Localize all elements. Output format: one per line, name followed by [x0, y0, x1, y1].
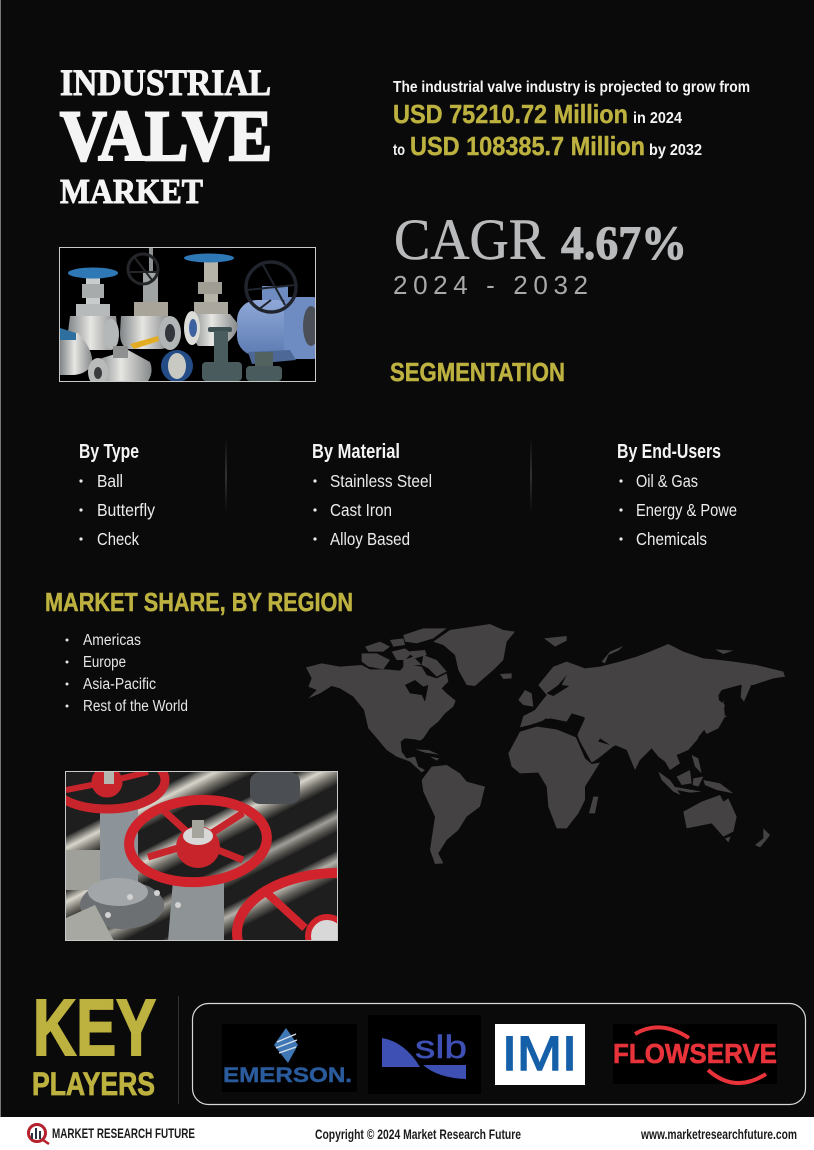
butterfly valve	[161, 350, 193, 382]
title: INDUSTRIAL	[60, 63, 271, 104]
column: by type	[79, 441, 155, 549]
footer band	[0, 1117, 814, 1150]
logo: emerson: EMERSON.	[223, 1064, 352, 1087]
CAGR: 4.67%	[561, 217, 687, 270]
title	[60, 63, 272, 211]
footer band: MARKET RESEARCH FUTURE	[52, 1125, 195, 1141]
main wheel	[126, 795, 270, 887]
world map	[306, 624, 785, 864]
left check valve	[60, 328, 92, 375]
title: VALVE	[60, 96, 272, 176]
logo: imi: IMI	[502, 1028, 577, 1081]
column: by end-users: Chemicals	[636, 529, 707, 549]
ball valve with yellow handle	[88, 336, 159, 386]
top left wheel	[66, 772, 170, 814]
logo: slb: slb	[415, 1029, 467, 1065]
lower right wheel	[232, 868, 337, 940]
silver valve bodies	[66, 805, 224, 941]
market size text: by 2032	[649, 142, 702, 159]
CAGR: 2024 - 2032	[393, 270, 588, 300]
column: by type: Check	[97, 529, 139, 549]
column: by material: Alloy Based	[330, 529, 410, 549]
key players heading: PLAYERS	[32, 1066, 155, 1102]
logo: emerson	[222, 1024, 357, 1092]
market size text	[393, 79, 750, 161]
column: by material: By Material	[312, 441, 400, 463]
photo: red handwheel valves	[65, 771, 338, 941]
region list: Asia-Pacific	[83, 676, 156, 693]
key players logo panel	[192, 1004, 806, 1104]
footer band: Copyright © 2024 Market Research Future	[315, 1126, 521, 1142]
logo: imi	[495, 1024, 585, 1085]
photo: assorted industrial valves	[60, 248, 319, 386]
column: by end-users: Energy & Powe	[636, 500, 737, 520]
CAGR: CAGR	[394, 207, 545, 272]
region list: Europe	[83, 654, 126, 671]
valve A	[68, 268, 119, 350]
heading: segmentation: SEGMENTATION	[390, 357, 565, 387]
region list: Americas	[83, 632, 141, 649]
column: by end-users	[617, 441, 737, 549]
title: MARKET	[60, 172, 203, 211]
column: by type: Ball	[97, 471, 123, 491]
valve B gate	[120, 248, 181, 350]
valve D blue ball	[237, 262, 319, 364]
key players heading: KEY	[33, 983, 156, 1072]
key players heading	[32, 983, 156, 1102]
region list: Rest of the World	[83, 698, 188, 715]
logo: flowserve	[613, 1024, 777, 1084]
logo: flowserve: FLOWSERVE	[613, 1038, 777, 1069]
market size text: The industrial valve industry is projected to grow from	[393, 79, 750, 96]
column: by material: Stainless Steel	[330, 471, 432, 491]
column: by type: By Type	[79, 441, 139, 463]
valve C	[184, 254, 238, 346]
market size text: USD 108385.7 Million	[410, 131, 645, 161]
heading: market share by region: MARKET SHARE, BY REGION	[45, 587, 353, 617]
market size text: in 2024	[633, 110, 682, 127]
logo: slb	[368, 1015, 481, 1094]
region list	[66, 632, 188, 715]
market size text: to	[393, 142, 405, 159]
column: by material	[312, 441, 432, 549]
forged dark valves	[202, 327, 282, 381]
column: by material: Cast Iron	[330, 500, 392, 520]
column: by end-users: Oil & Gas	[636, 471, 698, 491]
footer logo	[28, 1124, 49, 1144]
market size text: USD 75210.72 Million	[393, 99, 628, 129]
column: by end-users: By End-Users	[617, 441, 721, 463]
column: by type: Butterfly	[97, 500, 155, 520]
CAGR	[393, 207, 687, 300]
